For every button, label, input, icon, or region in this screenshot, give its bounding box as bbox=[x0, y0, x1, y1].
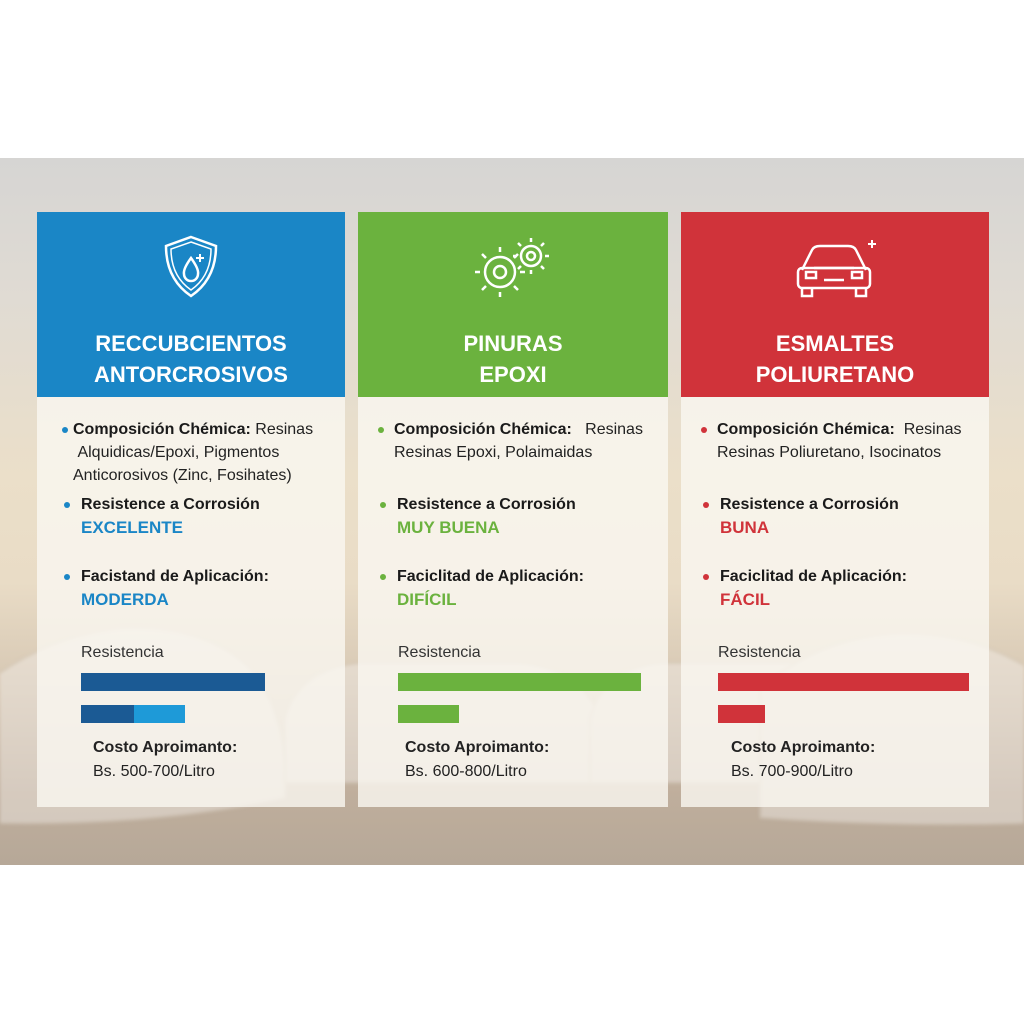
item: application bbox=[81, 568, 269, 609]
item: composition: Composición Chémica: Resinas bbox=[717, 421, 962, 438]
header green: PINURAS bbox=[463, 331, 562, 356]
item: application: DIFÍCIL bbox=[397, 590, 456, 609]
item: composition: Anticorosivos (Zinc, Fosihates) bbox=[73, 467, 292, 484]
bar chart: resistance bbox=[398, 644, 641, 723]
header red bbox=[681, 212, 989, 397]
item: application: Faciclitad de Aplicación: bbox=[397, 568, 584, 585]
item: application bbox=[720, 568, 907, 609]
item: composition: Composición Chémica: Resinas bbox=[73, 421, 313, 438]
icon: shield with drop bbox=[164, 236, 218, 298]
item: resistance: Resistence a Corrosión bbox=[81, 496, 260, 513]
item: application bbox=[397, 568, 584, 609]
header green: EPOXI bbox=[479, 362, 547, 387]
item: application: MODERDA bbox=[81, 590, 169, 609]
panel: polyurethane bbox=[681, 212, 989, 807]
cost: Bs. 600-800/Litro bbox=[405, 763, 527, 780]
cost: Costo Aproimanto: bbox=[93, 739, 237, 756]
item: resistance: EXCELENTE bbox=[81, 518, 183, 537]
item: resistance: MUY BUENA bbox=[397, 518, 500, 537]
item: composition: Resinas Epoxi, Polaimaidas bbox=[394, 444, 592, 461]
item: application: Faciclitad de Aplicación: bbox=[720, 568, 907, 585]
bar chart: resistance: Resistencia bbox=[398, 644, 481, 661]
item: composition bbox=[717, 421, 962, 461]
bar chart: resistance: Resistencia bbox=[81, 644, 164, 661]
panel: epoxy bbox=[358, 212, 668, 807]
header blue: RECCUBCIENTOS bbox=[95, 331, 287, 356]
bar chart: resistance: Resistencia bbox=[718, 644, 801, 661]
item: application: FÁCIL bbox=[720, 590, 770, 609]
item: resistance bbox=[397, 496, 576, 537]
cost: Bs. 700-900/Litro bbox=[731, 763, 853, 780]
icon: gears bbox=[475, 238, 549, 297]
cost bbox=[405, 739, 549, 780]
item: composition bbox=[73, 421, 313, 484]
cost: Costo Aproimanto: bbox=[731, 739, 875, 756]
header green bbox=[358, 212, 668, 397]
item: resistance bbox=[720, 496, 899, 537]
cost: Costo Aproimanto: bbox=[405, 739, 549, 756]
header blue bbox=[37, 212, 345, 397]
header blue: ANTORCROSIVOS bbox=[94, 362, 288, 387]
item: composition: Composición Chémica: Resinas bbox=[394, 421, 643, 438]
header red: ESMALTES bbox=[776, 331, 894, 356]
item: resistance bbox=[81, 496, 260, 537]
item: composition: Alquidicas/Epoxi, Pigmentos bbox=[77, 444, 279, 461]
icon: car bbox=[796, 240, 876, 298]
item: application: Facistand de Aplicación: bbox=[81, 568, 269, 585]
item: composition: Resinas Poliuretano, Isocinatos bbox=[717, 444, 941, 461]
panel: anticorrosive coatings bbox=[37, 212, 345, 807]
bar chart: resistance bbox=[81, 644, 265, 723]
item: resistance: BUNA bbox=[720, 518, 769, 537]
cost: Bs. 500-700/Litro bbox=[93, 763, 215, 780]
header red: POLIURETANO bbox=[756, 362, 914, 387]
cost bbox=[93, 739, 237, 780]
item: resistance: Resistence a Corrosión bbox=[397, 496, 576, 513]
background photo band bbox=[0, 158, 1024, 865]
item: composition bbox=[394, 421, 643, 461]
bar chart: resistance bbox=[718, 644, 969, 723]
item: resistance: Resistence a Corrosión bbox=[720, 496, 899, 513]
cost bbox=[731, 739, 875, 780]
